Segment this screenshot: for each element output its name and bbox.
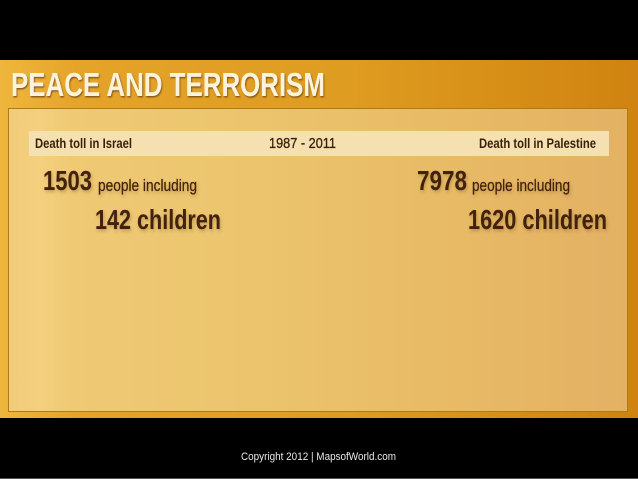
stat: Palestine total	[417, 165, 570, 196]
stat: Israel children: 142 children	[95, 204, 221, 235]
golden background	[0, 60, 638, 418]
stat: Palestine total: 7978	[417, 165, 467, 196]
top black band	[0, 0, 638, 60]
panel: death toll content	[8, 108, 628, 412]
title: PEACE AND TERRORISM	[11, 66, 325, 103]
heading: Israel: Death toll in Israel	[35, 136, 132, 151]
heading: years: 1987 - 2011	[269, 135, 336, 152]
stat: Israel total	[43, 165, 197, 196]
copyright footer: Copyright 2012 | MapsofWorld.com	[241, 451, 396, 463]
stat: Palestine total: people including	[472, 177, 570, 195]
heading: Palestine: Death toll in Palestine	[479, 136, 596, 151]
stat: Israel total: people including	[98, 177, 197, 195]
header bar	[29, 131, 609, 156]
bottom edge line	[0, 478, 638, 479]
stat: Israel total: 1503	[43, 165, 92, 196]
